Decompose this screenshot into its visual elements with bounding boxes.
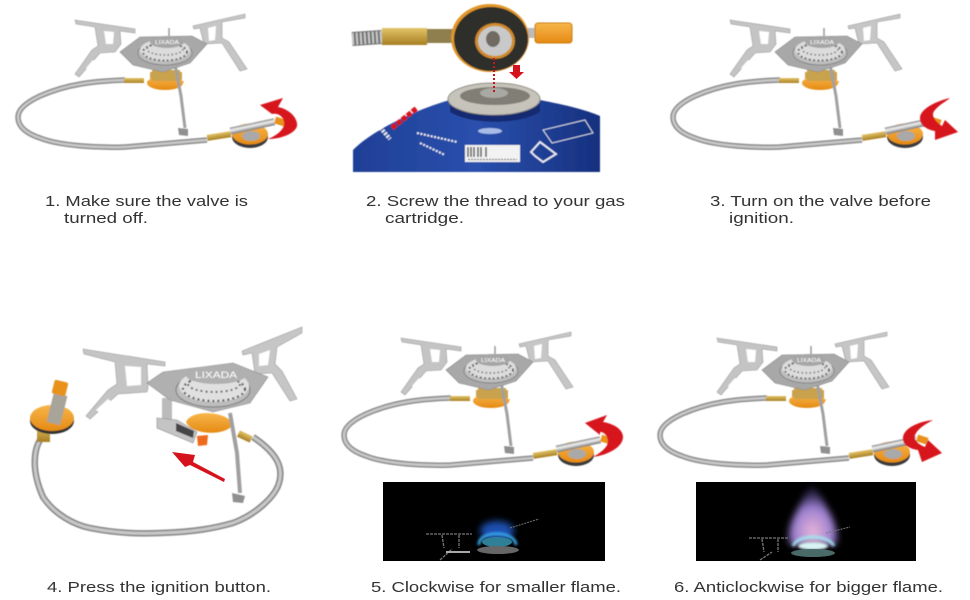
- stove with hose: LIXADA: [797, 358, 821, 364]
- hose end: [352, 37, 382, 39]
- step 1 text: turned off.: [64, 210, 148, 227]
- step 3 text: 3. Turn on the valve before: [710, 193, 931, 210]
- stove with hose: LIXADA: [810, 40, 834, 46]
- step 1 text: 1. Make sure the valve is: [45, 193, 248, 210]
- knob: [526, 28, 540, 38]
- flame photo: small: [383, 482, 605, 561]
- icon: red rotation arrow: [903, 420, 942, 462]
- stove close-up: [30, 327, 302, 533]
- icon: red rotation arrow: [260, 98, 297, 139]
- icon: red rotation arrow: [920, 98, 958, 140]
- panel 1: valve off: [18, 14, 297, 227]
- photo: gas cartridge: [352, 4, 600, 172]
- regulator disc: [451, 4, 529, 72]
- step 3 text: ignition.: [729, 210, 794, 227]
- step 5 text: 5. Clockwise for smaller flame.: [371, 579, 621, 596]
- stove with hose: [660, 332, 929, 466]
- left pot support: [83, 349, 165, 419]
- right pot support: [242, 327, 302, 401]
- stove close-up: LIXADA: [195, 370, 237, 380]
- stove with hose: LIXADA: [481, 358, 505, 364]
- stove with hose: [673, 14, 942, 148]
- icon: red arrow to button: [172, 452, 225, 482]
- step 2 text: cartridge.: [385, 210, 464, 227]
- icon: down arrow: [509, 65, 524, 79]
- regulator: [30, 408, 74, 434]
- cartridge markings: [378, 120, 593, 162]
- panel 4: press ignition button: [30, 327, 302, 596]
- panel 3: turn on the valve: [673, 14, 958, 227]
- small blue flame: [479, 521, 516, 547]
- leg: [230, 413, 240, 493]
- panel 6: bigger flame: [660, 332, 943, 596]
- stove silhouette: [749, 527, 850, 560]
- panel 5: smaller flame: [344, 332, 623, 596]
- icon: red rotation arrow: [585, 415, 623, 457]
- stove with hose: LIXADA: [155, 40, 179, 46]
- step 4 text: 4. Press the ignition button.: [47, 579, 271, 596]
- dotted alignment line: [493, 58, 495, 92]
- barcode: [465, 145, 520, 162]
- flame photo: big: [696, 482, 916, 561]
- igniter and valve: [186, 413, 233, 433]
- stove with hose: [344, 332, 613, 466]
- stove silhouette: [426, 519, 539, 560]
- panel 2: screw on cartridge: [352, 4, 625, 227]
- step 2 text: 2. Screw the thread to your gas: [366, 193, 625, 210]
- step 6 text: 6. Anticlockwise for bigger flame.: [674, 579, 943, 596]
- burner plate: [147, 363, 268, 412]
- stove with hose: [18, 14, 287, 148]
- big purple flame: [788, 482, 837, 550]
